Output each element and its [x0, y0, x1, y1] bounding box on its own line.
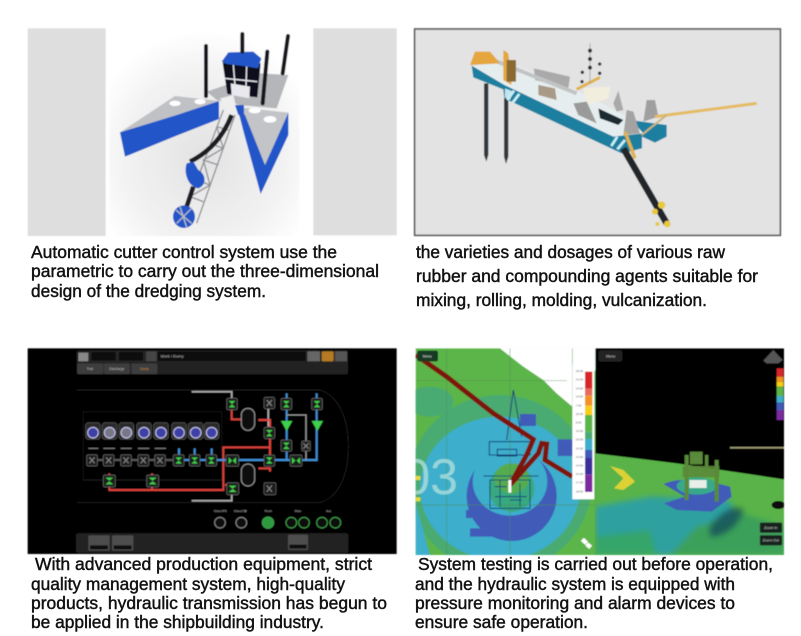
3D seabed view: Menu — [606, 354, 615, 358]
panel: teal dredger render — [415, 29, 780, 235]
2D depth map: 03 — [402, 449, 458, 505]
caption: system testing: and the hydraulic system is equipped with — [415, 574, 735, 594]
depth legend: 15.00 — [576, 472, 583, 476]
caption: system testing: ensure safe operation. — [415, 612, 588, 632]
grey closed valve marks — [89, 400, 309, 492]
green valve markers — [105, 401, 323, 492]
bottom pump indicators — [215, 517, 341, 528]
pump labels: Main — [295, 509, 301, 513]
depth legend: 14.00 — [576, 386, 583, 390]
3D seabed view: Zoom Out — [763, 539, 779, 543]
caption: cutter control: design of the dredging system. — [31, 281, 266, 301]
caption: raw rubber: the varieties and dosages of various raw — [416, 242, 725, 262]
pump labels: Gland PS — [214, 509, 227, 513]
caption: production equipment: be applied in the shipbuilding industry. — [31, 612, 324, 632]
depth legend: 16.00 — [576, 369, 583, 373]
tanks — [241, 408, 255, 486]
top toolbar: Work / Dump — [161, 354, 185, 359]
caption: cutter control: parametric to carry out the three-dimensional — [31, 261, 379, 281]
blue nozzle icons — [86, 423, 219, 439]
depth legend: 14.00 — [576, 464, 583, 468]
depth legend: 17.00 — [576, 481, 583, 485]
depth legend: 18.00 — [576, 489, 583, 493]
depth legend: 15.00 — [576, 378, 583, 382]
caption: raw rubber: mixing, rolling, molding, vulcanization. — [416, 290, 707, 310]
screen background — [28, 348, 397, 554]
top toolbar: Dump — [140, 367, 149, 371]
caption: production equipment: With advanced production equipment, strict — [35, 554, 372, 574]
depth legend: 9.00 — [576, 420, 582, 424]
icon: dredger model — [120, 34, 288, 228]
top toolbar — [77, 351, 348, 374]
top toolbar: Trail — [87, 367, 93, 371]
pump labels: Aux — [326, 509, 332, 513]
2D depth map — [414, 348, 596, 556]
2D depth map: Menu — [423, 354, 432, 358]
pump labels — [214, 509, 332, 513]
3D seabed view — [595, 348, 785, 555]
left grey side band — [28, 28, 106, 236]
icon: spud poles — [484, 83, 508, 164]
pump labels: Flush — [265, 509, 272, 513]
depth legend — [572, 364, 594, 499]
depth legend: 16.00 — [576, 412, 583, 416]
caption: cutter control: Automatic cutter control system use the — [31, 242, 337, 262]
caption: production equipment: products, hydraulic transmission has begun to — [31, 593, 387, 613]
caption: system testing: pressure monitoring and alarm devices to — [415, 593, 735, 613]
depth legend: 10.00 — [576, 429, 583, 433]
pump labels: Gland SB — [234, 509, 247, 513]
right grey side band — [313, 28, 397, 235]
depth legend: 25.00 — [576, 438, 583, 442]
caption: system testing: System testing is carried out before operation, — [418, 554, 773, 574]
top toolbar: Discharge — [109, 367, 124, 371]
bottom toolbar — [76, 533, 348, 553]
caption: cutter control — [31, 242, 379, 301]
caption: raw rubber: rubber and compounding agents suitable for — [416, 266, 758, 286]
depth legend: 13.00 — [576, 395, 583, 399]
depth legend: 7.00 — [576, 403, 582, 407]
caption: raw rubber — [416, 242, 758, 310]
caption: production equipment — [31, 554, 387, 632]
piping diagram — [87, 392, 317, 501]
depth legend: 12.00 — [576, 446, 583, 450]
ship outline — [77, 390, 348, 503]
icon: dredger hull and superstructure — [470, 43, 757, 227]
panel: seabed survey maps — [402, 348, 785, 572]
caption: production equipment: quality management system, high-quality — [31, 574, 345, 594]
3D seabed view: Zoom In — [764, 526, 777, 530]
pump valves — [87, 397, 322, 495]
render background — [109, 30, 299, 236]
depth legend: 13.00 — [576, 455, 583, 459]
panel: blue cutter suction dredger render — [28, 28, 397, 236]
caption: system testing — [415, 554, 773, 632]
panel: pump control screen — [28, 348, 397, 554]
panel background — [415, 29, 780, 235]
